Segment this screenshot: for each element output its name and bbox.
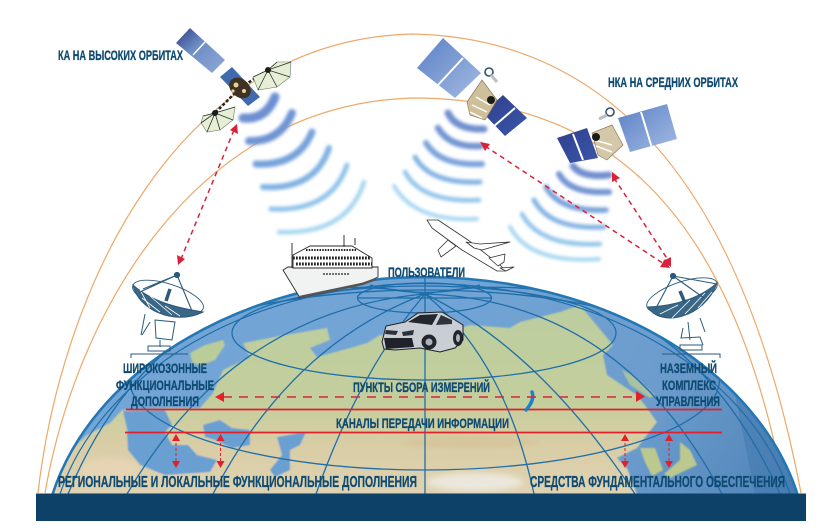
red line: lower information channel (125, 432, 722, 434)
label: ground control segment: УПРАВЛЕНИЯ (656, 393, 720, 409)
land: Korea (640, 448, 663, 476)
satellite: high orbit spacecraft (176, 28, 291, 132)
dashed arrow: centre satellite to right antenna (480, 142, 670, 268)
red line: upper information channel (126, 408, 722, 410)
label: medium orbit spacecraft: НКА НА СРЕДНИХ ОРБИТАХ (608, 74, 738, 90)
label: ground control segment (656, 359, 720, 409)
sea: Mediterranean (127, 432, 217, 475)
satellite: centre navigation spacecraft (417, 38, 527, 136)
land: Japan (664, 442, 697, 478)
dashed double arrow: measurement points (215, 391, 645, 402)
signal waves: right satellite (510, 166, 609, 260)
icon: ship (283, 235, 378, 298)
sea: Caspian (270, 432, 306, 477)
desert highlights (427, 473, 523, 491)
globe with continents and coordinate grid (40, 277, 800, 494)
label: ground control segment: НАЗЕМНЫЙ (660, 359, 717, 376)
icon: car (382, 312, 463, 352)
satellite: right navigation spacecraft (557, 104, 677, 163)
dark right shelf (736, 396, 790, 494)
orbit: outer medium-high arc (38, 34, 801, 493)
signal waves: centre satellite (394, 113, 484, 219)
land: Eurasia and North Africa (40, 305, 657, 494)
icon: airplane (427, 220, 514, 271)
label: information channels: КАНАЛЫ ПЕРЕДАЧИ ИНФОРМАЦИИ (336, 415, 509, 431)
signal waves: left satellite (243, 97, 364, 232)
orbit: inner arc (45, 98, 785, 493)
sea: Atlantic bay (123, 410, 172, 433)
label: regional and local augmentations: РЕГИОНАЛЬНЫЕ И ЛОКАЛЬНЫЕ ФУНКЦИОНАЛЬНЫЕ ДОПОЛНЕНИЯ (58, 474, 417, 491)
vertical double arrows: regional additions (172, 434, 673, 468)
label: wide-area augmentations: ДОПОЛНЕНИЯ (131, 393, 199, 409)
label: wide-area augmentations (116, 360, 214, 409)
dashed arrow: right satellite to right antenna (612, 172, 671, 267)
antenna: right ground station (643, 271, 721, 358)
baikal lake (526, 392, 533, 410)
dashed arrow: high orbit spacecraft to left antenna (177, 124, 238, 265)
land: Scandinavia (190, 340, 225, 366)
land: Kamchatka strip (622, 370, 655, 398)
label: wide-area augmentations: ШИРОКОЗОННЫЕ (123, 360, 207, 376)
label: users: ПОЛЬЗОВАТЕЛИ (388, 265, 465, 280)
grid: parallels and meridians (68, 277, 780, 494)
continents and seas (40, 305, 697, 494)
label: ground control segment: КОМПЛЕКС (662, 377, 716, 393)
label: high orbit spacecraft: КА НА ВЫСОКИХ ОРБИТАХ (58, 47, 183, 63)
base bar (36, 494, 806, 521)
antenna: left ground station (129, 272, 207, 358)
sea: Black Sea (203, 420, 250, 448)
label: measurement points: ПУНКТЫ СБОРА ИЗМЕРЕНИЙ (353, 378, 490, 395)
label: wide-area augmentations: ФУНКЦИОНАЛЬНЫЕ (116, 377, 214, 393)
